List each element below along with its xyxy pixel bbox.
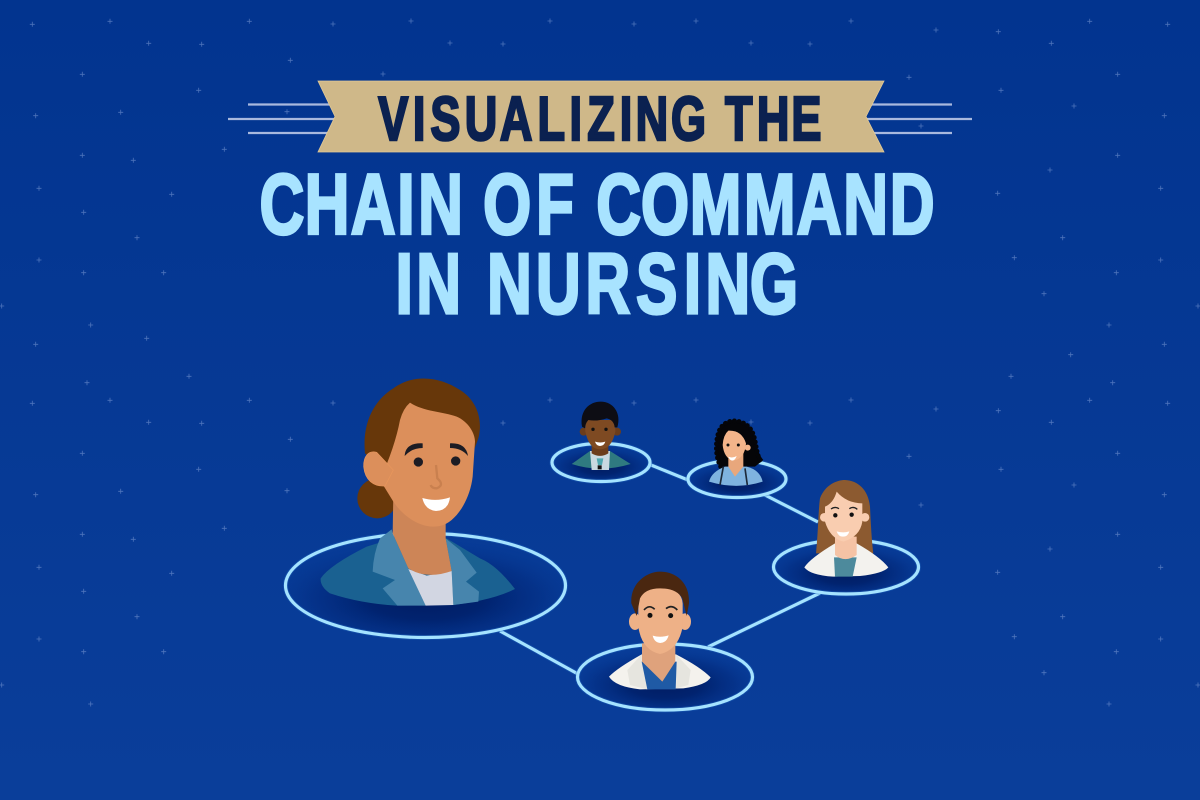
node rings [286,444,918,710]
person: doctor with long hair [804,480,888,577]
connector lines [500,465,820,674]
node wells [286,444,917,709]
heading: in nursing: IN NURSING [396,235,798,331]
heading: chain of command: CHAIN OF COMMAND [260,156,935,252]
banner side lines [228,104,972,133]
person: nurse leader [321,378,515,606]
person: doctor in white coat [609,572,711,689]
banner ribbon [318,81,884,152]
person: physician in teal jacket [572,402,631,470]
heading: visualizing the: VISUALIZING THE [378,84,821,154]
person: nurse with curly hair [709,421,763,486]
